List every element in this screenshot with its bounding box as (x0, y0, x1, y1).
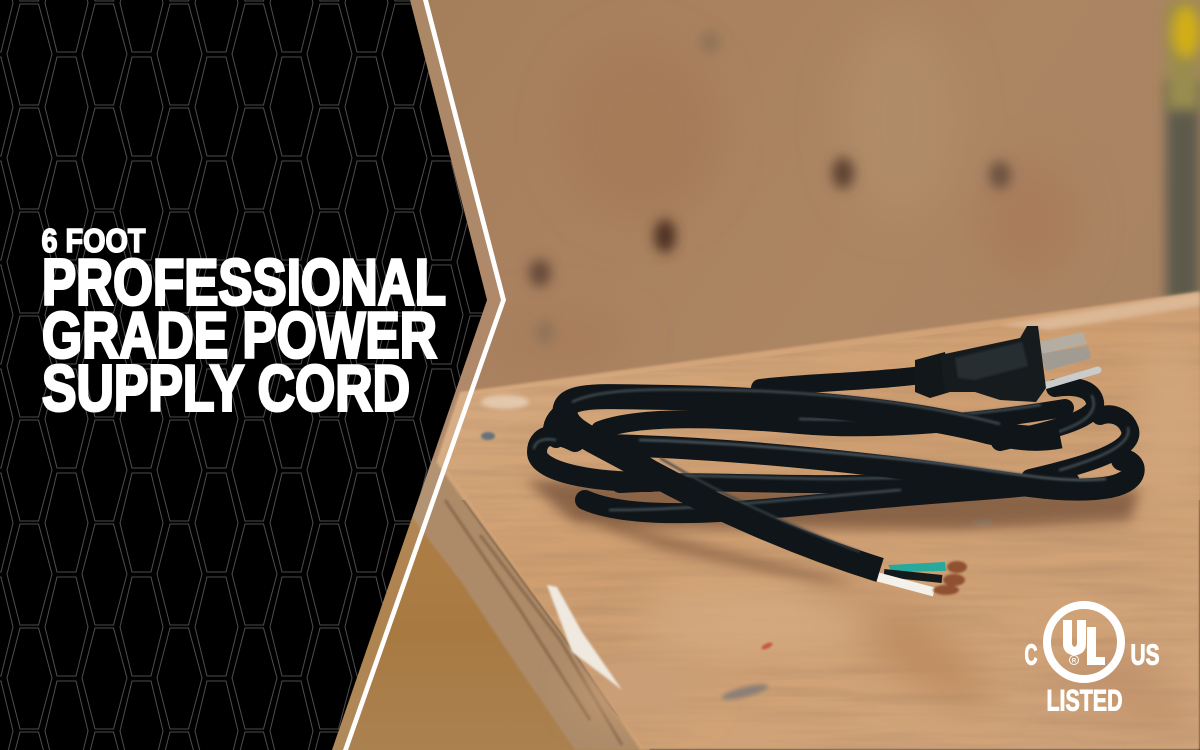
letter U (1063, 620, 1086, 655)
cord strands at back (537, 374, 1130, 513)
stripped wires (878, 561, 967, 595)
eyebrow: 6 foot: 6 FOOT (42, 222, 146, 259)
plug collar (915, 352, 950, 398)
wood grain (442, 300, 1200, 750)
back edge highlight (1000, 292, 1200, 330)
country c: C (1024, 640, 1038, 672)
front strand with free end (565, 397, 1060, 570)
title line 1: PROFESSIONAL (42, 246, 446, 318)
letter L (1087, 627, 1105, 665)
table top surface (436, 292, 1200, 750)
listed: LISTED (1046, 684, 1122, 718)
title line 2: GRADE POWER (42, 298, 437, 372)
UL ring (1047, 605, 1121, 679)
power cord photo subject (534, 326, 1134, 595)
cord highlights at back (534, 396, 1128, 510)
middle looping strand (605, 445, 1134, 490)
black chevron panel with hexagon pattern (0, 0, 500, 750)
plug prongs (1038, 332, 1087, 354)
country us: US (1130, 640, 1160, 672)
UL listed certification mark (1024, 605, 1160, 718)
cord shadow (525, 480, 1140, 584)
table scuffs (481, 395, 992, 703)
translucent chevron band (332, 0, 505, 750)
wood tone variation (580, 330, 1200, 744)
white chevron line (343, 0, 506, 750)
title (42, 222, 446, 424)
dark background beyond wall (1166, 0, 1200, 310)
wall knots (529, 31, 1011, 344)
space under the table (332, 516, 650, 750)
copper strands (933, 561, 967, 595)
plug body (940, 326, 1046, 402)
wall tone patches (622, 66, 1046, 239)
background photo: workshop wall and table (330, 0, 1200, 750)
blurred plywood wall (330, 0, 1200, 500)
registered mark: R (1072, 658, 1077, 664)
title line 3: SUPPLY CORD (42, 352, 410, 424)
table side edge (412, 460, 639, 750)
plug (915, 326, 1098, 402)
